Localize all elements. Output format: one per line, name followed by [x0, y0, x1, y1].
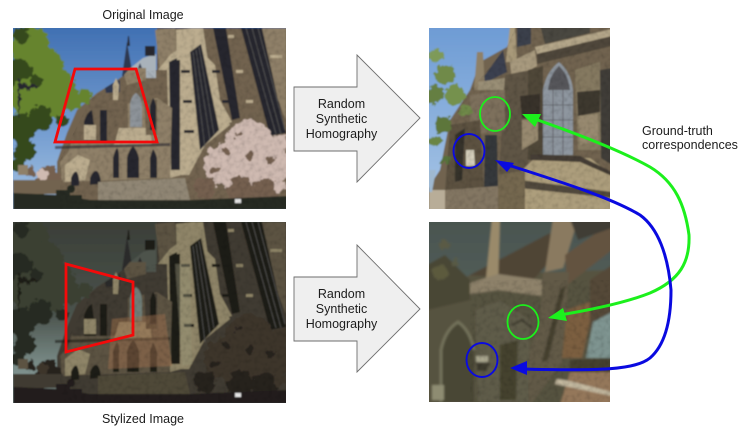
label: Stylized Image: Stylized Image	[102, 412, 184, 426]
label: ground-truth correspondences: correspondences	[642, 138, 738, 152]
blue circle: top image feature	[454, 134, 484, 168]
arrow: blue correspondence curve	[495, 160, 671, 375]
blue circle: bottom image feature	[466, 343, 498, 377]
photo: homography warp of original image	[426, 25, 614, 213]
arrow: random synthetic homography (top): Synthetic	[316, 112, 367, 126]
label: Original Image: Original Image	[102, 8, 184, 22]
photo: stylized cathedral image	[3, 219, 292, 407]
photo: homography warp of stylized image	[426, 219, 614, 405]
arrow: random synthetic homography (bottom): Random	[318, 287, 365, 301]
green circle: bottom image feature	[508, 305, 538, 339]
arrow: random synthetic homography (top)	[294, 55, 420, 182]
label: ground-truth correspondences	[642, 124, 738, 152]
arrow: random synthetic homography (bottom): Homography	[306, 317, 378, 331]
label: ground-truth correspondences: Ground-truth	[642, 124, 713, 138]
green circle: top image feature	[480, 97, 510, 131]
arrow: random synthetic homography (bottom)	[294, 245, 420, 372]
red quadrilateral on original image	[55, 69, 157, 142]
arrow: green correspondence curve	[522, 114, 689, 321]
arrow: random synthetic homography (bottom): Synthetic	[316, 302, 367, 316]
photo: original cathedral image	[3, 25, 292, 213]
arrow: random synthetic homography (top): Homography	[306, 127, 378, 141]
arrow: random synthetic homography (top): Random	[318, 97, 365, 111]
red quadrilateral on stylized image	[66, 264, 133, 352]
